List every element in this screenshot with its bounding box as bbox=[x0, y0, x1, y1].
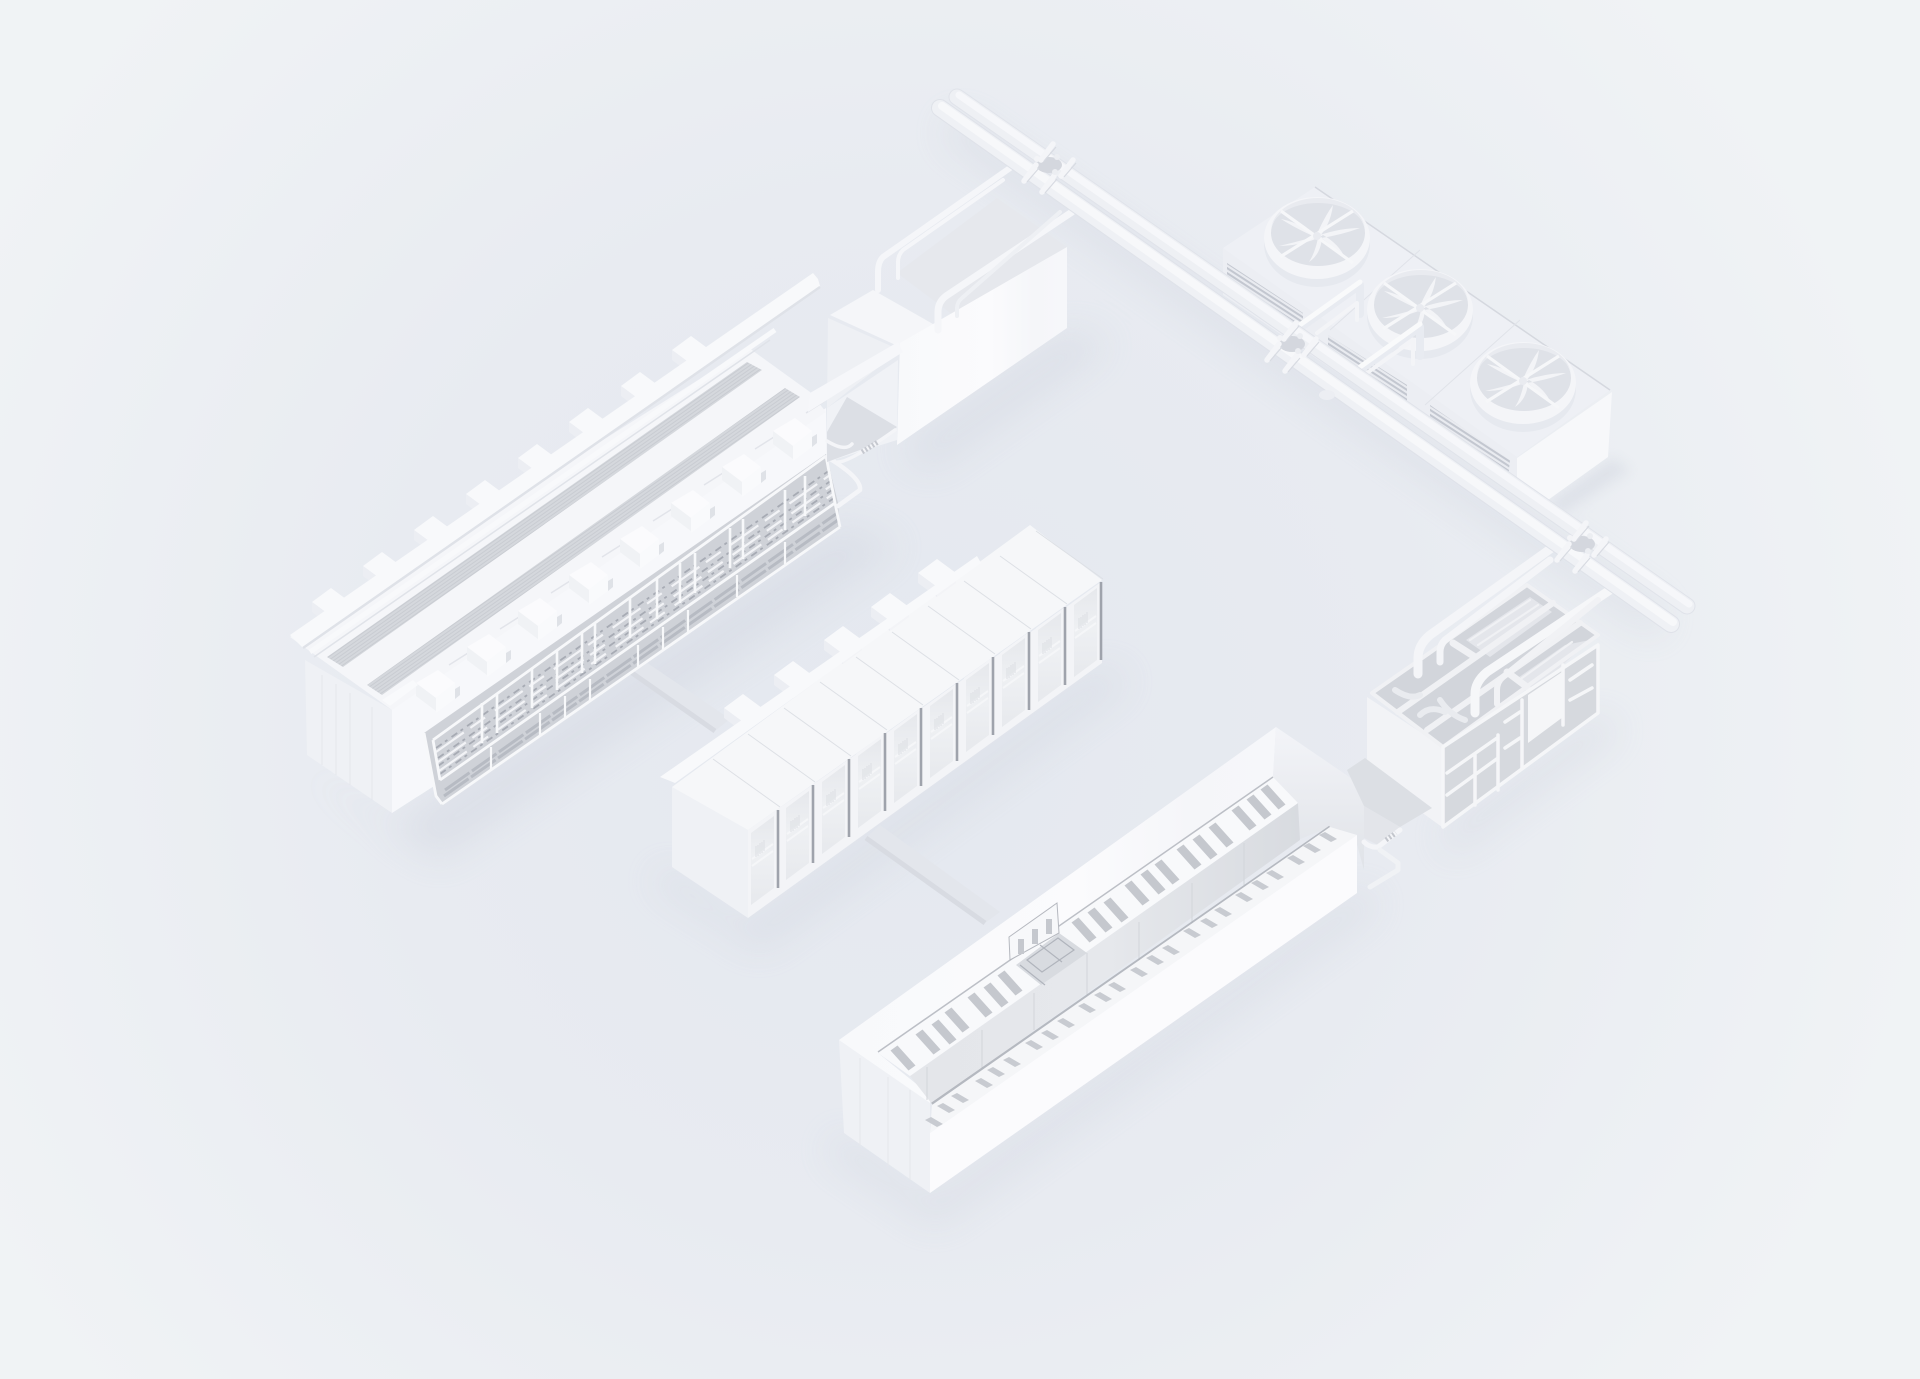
rear rail bbox=[660, 556, 981, 783]
front wall bbox=[930, 835, 1357, 1193]
inner end wall bbox=[1273, 727, 1364, 870]
roof bbox=[290, 348, 826, 710]
rear pipe bbox=[957, 95, 1689, 606]
box left wall bbox=[827, 318, 900, 408]
front rack top bbox=[925, 827, 1357, 1133]
right face bbox=[1517, 392, 1612, 500]
rack doors bbox=[713, 531, 1103, 909]
rear roof bbox=[897, 198, 1067, 318]
long white wall bbox=[897, 247, 1067, 445]
tunnel rail bbox=[808, 342, 903, 412]
open hatch bbox=[1009, 903, 1087, 985]
unit: server rack row bbox=[660, 525, 1103, 918]
branch pipes to building bbox=[878, 168, 1072, 330]
ground shadows bbox=[300, 125, 1660, 1225]
front face bbox=[748, 582, 1102, 918]
front pipe bbox=[940, 106, 1673, 624]
box top bbox=[830, 290, 940, 347]
floor gap bbox=[932, 827, 1330, 1104]
end face bbox=[305, 660, 392, 813]
front roof strip bbox=[382, 680, 418, 706]
unit: triple fan cooler bbox=[1223, 187, 1612, 500]
unit: open data hall bbox=[839, 727, 1364, 1193]
front blocks bbox=[416, 401, 825, 713]
valve cluster: building branch bbox=[1024, 144, 1076, 193]
rear blocks bbox=[312, 336, 710, 626]
front wall bbox=[392, 408, 839, 813]
unit: heat exchanger skid bbox=[1367, 547, 1610, 827]
top opening bbox=[1372, 585, 1598, 747]
floor conduit: rack to bottom hall bbox=[866, 825, 1000, 923]
branch pipes to fans bbox=[1297, 282, 1420, 373]
rear rack top bbox=[878, 777, 1298, 1076]
rear rail bbox=[290, 273, 820, 657]
end face bbox=[672, 787, 748, 918]
drain stub bbox=[1319, 390, 1335, 400]
roof bbox=[672, 525, 1102, 830]
rear wall top bbox=[839, 727, 1276, 1103]
valve cluster: skid branch bbox=[1557, 523, 1609, 572]
louvre wall bbox=[1223, 248, 1517, 495]
rear rack face bbox=[910, 803, 1300, 1104]
fence and pipework bbox=[424, 454, 860, 804]
rear blocks bbox=[724, 559, 956, 732]
fans bbox=[1264, 197, 1576, 432]
unit: generator container with fence bbox=[290, 273, 860, 813]
roof vents bbox=[327, 362, 800, 695]
unit: building with tunnel and branch pipes bbox=[808, 168, 1072, 462]
front frame bbox=[1443, 645, 1598, 827]
left end face bbox=[839, 1040, 930, 1193]
plate panel bbox=[1528, 672, 1563, 743]
tunnel interior bbox=[827, 360, 898, 462]
main header pipes bbox=[940, 95, 1689, 624]
floor conduit: unit A to rack bbox=[625, 656, 730, 731]
left face bbox=[1367, 697, 1443, 827]
top plate bbox=[1223, 187, 1610, 457]
pipes into skid bbox=[1418, 547, 1610, 713]
connector: skid to hall bbox=[1347, 758, 1432, 887]
valve cluster: cooler branch bbox=[1267, 323, 1319, 372]
